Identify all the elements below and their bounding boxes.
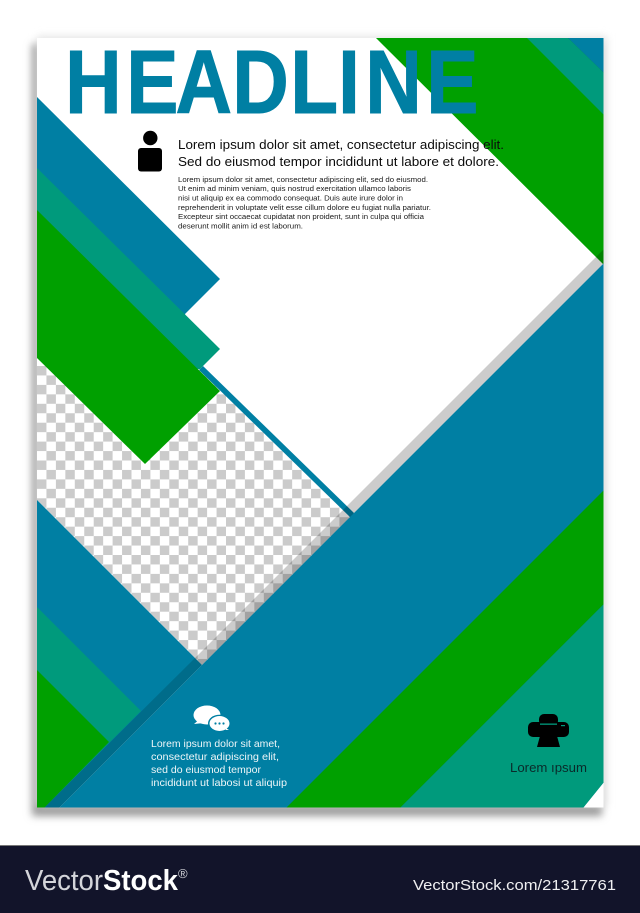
white caption text: incididunt ut labosi ut aliquip	[151, 777, 287, 789]
diagonal shadow strip, upper part	[195, 249, 604, 665]
page drop shadow	[32, 36, 607, 816]
icon: printer	[528, 714, 569, 747]
poster page	[37, 38, 604, 808]
top-left teal band	[37, 168, 220, 370]
top-right blue corner	[568, 38, 604, 73]
top-right teal stripe	[527, 38, 604, 115]
body text paragraph	[178, 175, 431, 230]
headline: HEADLINE	[65, 32, 478, 132]
top-right green corner	[376, 38, 604, 265]
white caption text	[151, 738, 287, 789]
body text paragraph: Ut enim ad minim veniam, quis nostrud exercitation ullamco laboris	[178, 184, 411, 193]
footer logo: VectorStock	[25, 865, 179, 897]
subheading text	[178, 138, 504, 169]
bottom-left green corner	[37, 670, 109, 808]
top-left blue band	[37, 97, 220, 319]
bottom-right green band	[286, 490, 604, 808]
footer bar	[0, 845, 640, 913]
bottom-left teal band	[37, 607, 141, 808]
icon: person	[138, 131, 162, 172]
bottom-left blue band	[37, 500, 202, 808]
body text paragraph: reprehenderit in voluptate velit esse cillum dolore eu fugiat nulla pariatur.	[178, 203, 431, 212]
subheading text: Sed do eiusmod tempor incididunt ut labore et dolore.	[178, 155, 499, 169]
icon: speech bubbles	[194, 706, 231, 732]
printer caption: Lorem ıpsum	[510, 760, 587, 775]
footer image id: VectorStock.com/21317761	[413, 877, 616, 894]
thin blue diagonal line	[199, 366, 354, 518]
body text paragraph: Excepteur sint occaecat cupidatat non proident, sunt in culpa qui officia	[178, 212, 425, 221]
top-left green block	[37, 210, 220, 464]
body text paragraph: deserunt mollit anim id est laborum.	[178, 222, 303, 230]
white caption text: Lorem ipsum dolor sit amet,	[151, 738, 280, 750]
footer logo: ®	[178, 866, 188, 881]
white caption text: sed do eiusmod tempor	[151, 764, 261, 776]
white caption text: consectetur adipiscing elit,	[151, 751, 279, 763]
bottom-right teal band	[400, 604, 604, 808]
subheading text: Lorem ipsum dolor sit amet, consectetur adipiscing elit.	[178, 138, 504, 152]
diagonal shadow strip, lower part	[44, 658, 202, 808]
body text paragraph: Lorem ipsum dolor sit amet, consectetur adipiscing elit, sed do eiusmod.	[178, 175, 428, 184]
body text paragraph: nisi ut aliquip ex ea commodo consequat. Duis aute irure dolor in	[178, 194, 403, 202]
large blue diagonal band	[59, 263, 604, 808]
image placeholder: checkerboard	[37, 358, 352, 665]
